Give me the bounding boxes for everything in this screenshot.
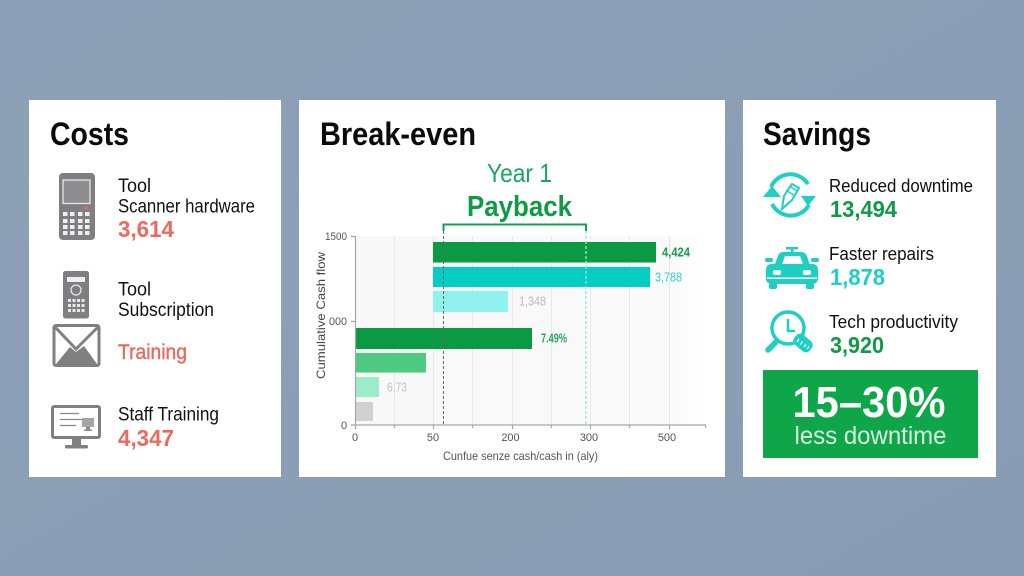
y axis title: Cumulative Cash flow [314,252,328,379]
icon: car [765,247,819,289]
bar: 7.49% [355,328,532,349]
label: payback: Payback [467,191,573,223]
text: tech productivity [829,312,958,358]
heading: savings: Savings [763,116,871,152]
x axis labels: 0 [352,432,358,444]
text: faster repairs: Faster repairs [829,244,934,264]
bracket: payback period [444,224,586,231]
bar: grey [355,402,373,421]
bar: 3,788 [433,267,650,287]
value labels: 1,348 [519,294,546,308]
x axis labels: 300 [580,432,598,444]
heading: break-even: Break-even [320,116,476,152]
marker: start of payback [442,231,444,424]
text: tool scanner hardware [118,176,255,242]
callout: 15–30% less downtime: less downtime [794,422,946,450]
text: reduced downtime [829,176,973,222]
text: reduced downtime: 13,494 [830,196,897,222]
bar: 6,73 [355,377,379,397]
text: faster repairs [829,244,934,290]
text: tool scanner hardware: Tool [118,176,151,197]
marker: end of payback [585,231,587,424]
panel: costs [29,100,281,477]
bar chart [314,231,706,463]
y axis labels: 0 [341,420,347,432]
bar: green mid [355,353,426,372]
text: tech productivity: Tech productivity [829,312,958,332]
x axis labels: 200 [501,432,520,444]
text: training: Training [118,341,187,364]
text: tool subscription: Tool [118,280,151,300]
x axis title: Cunfue senze cash/cash in (aly) [443,449,598,463]
y axis labels: 1500 [325,231,347,243]
icon: reduced downtime cycle [763,174,816,216]
icon: magnifier with clock [768,312,815,354]
heading: costs: Costs [50,116,129,152]
value labels: 7.49% [541,330,567,346]
text: tool scanner hardware: Scanner hardware [118,196,255,218]
panel: savings [743,100,996,477]
value labels: 6,73 [387,380,407,394]
text: staff training: Staff Training [118,404,219,426]
x axis labels: 50 [427,432,439,444]
text: tech productivity: 3,920 [830,332,884,358]
text: tool subscription: Subscription [118,300,214,321]
x axis labels: 500 [658,432,676,444]
icon: subscription device [63,271,89,318]
bar: 1,348 [433,291,508,312]
icon: monitor [52,406,100,448]
text: staff training [118,404,219,451]
y axis labels: 000 [329,316,347,328]
text: reduced downtime: Reduced downtime [829,176,973,196]
value labels [387,244,691,394]
axes [351,236,706,429]
label: year 1: Year 1 [487,158,552,188]
icon: scanner hardware [59,173,95,240]
value labels: 4,424 [662,244,691,260]
text: staff training: 4,347 [118,425,174,451]
text: faster repairs: 1,878 [830,264,885,290]
text: tool scanner hardware: 3,614 [118,216,174,242]
x axis labels [352,432,676,444]
panel: break-even [299,100,725,477]
value labels: 3,788 [655,270,682,284]
callout: 15–30% less downtime [763,370,978,458]
bar: 4,424 [433,242,656,262]
y axis labels [325,231,347,432]
callout: 15–30% less downtime: 15–30% [792,378,946,427]
icon: envelope [54,326,99,366]
text: tool subscription [118,280,214,321]
